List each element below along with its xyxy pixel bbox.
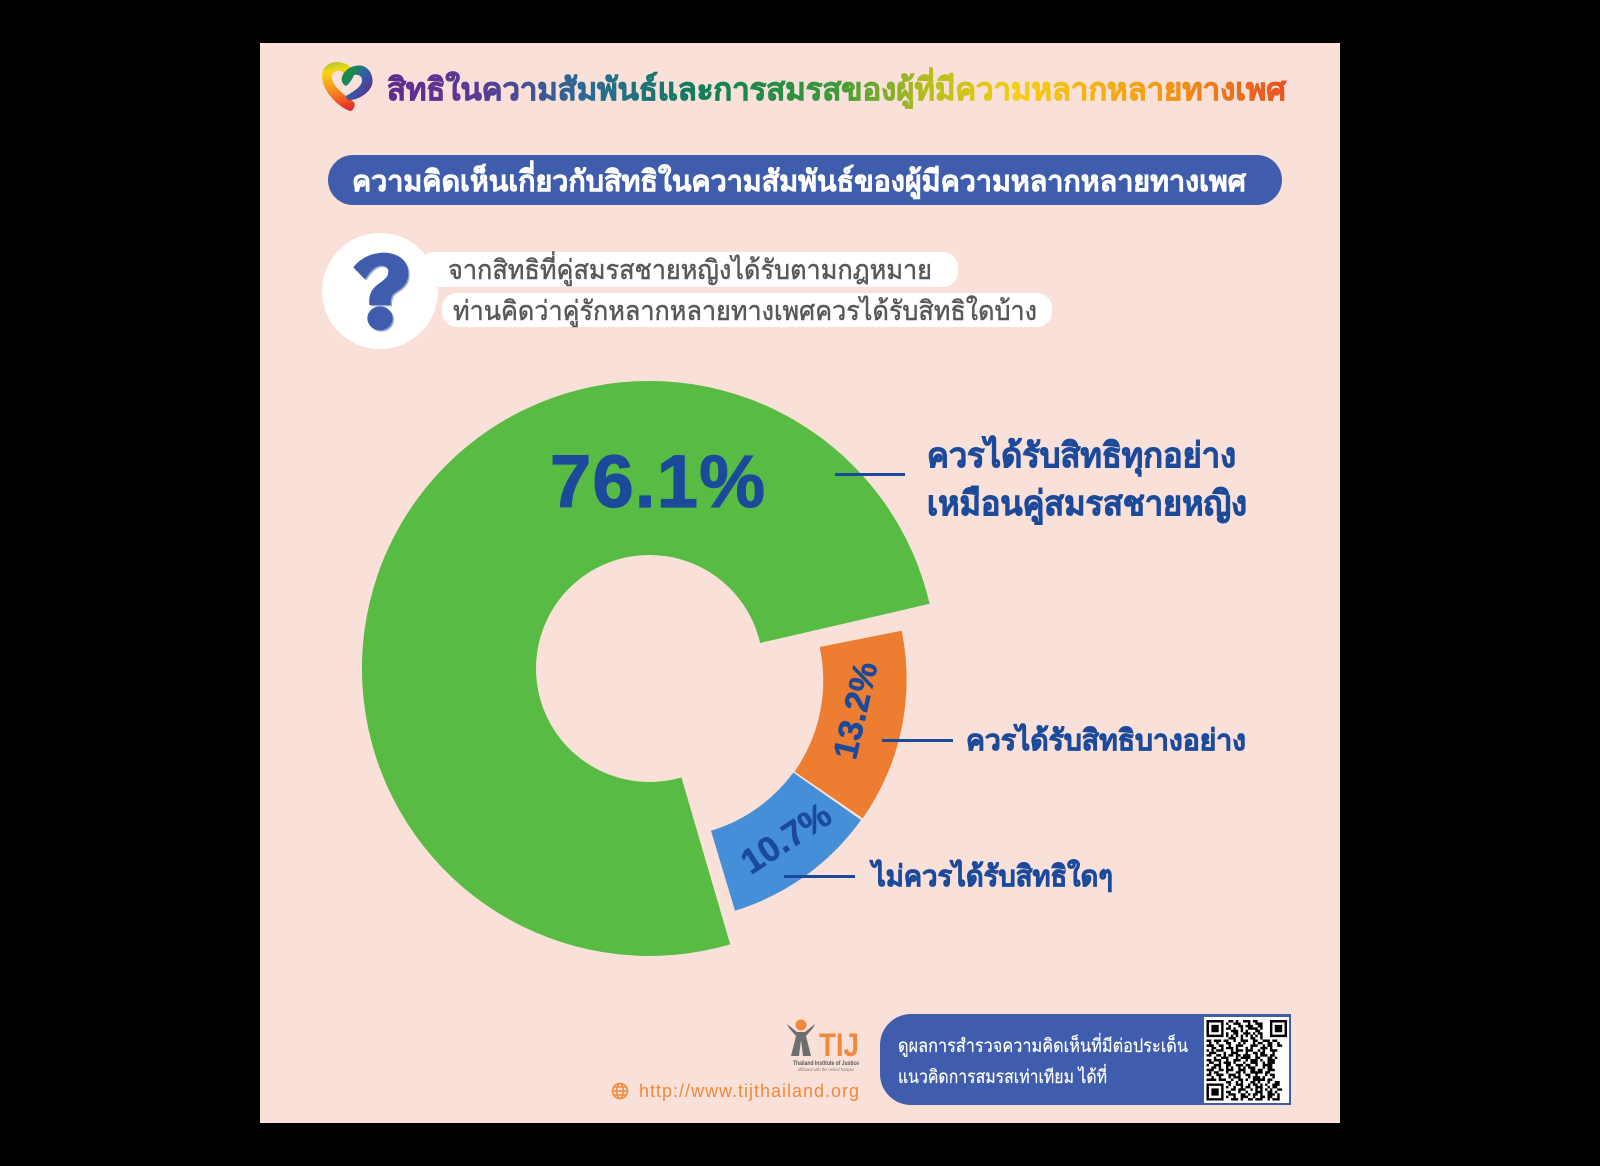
callout: no rights: ไม่ควรได้รับสิทธิใดๆ (869, 859, 1113, 893)
subtitle banner: ความคิดเห็นเกี่ยวกับสิทธิในความสัมพันธ์ของผู้มีความหลากหลายทางเพศ (352, 160, 1247, 199)
question block (322, 233, 1052, 349)
url: http://www.tijthailand.org (639, 1081, 859, 1101)
website link (612, 1081, 859, 1101)
survey text: แนวคิดการสมรสเท่าเทียม ได้ที่ (898, 1064, 1107, 1087)
QR code (1204, 1017, 1289, 1103)
background panel (260, 43, 1340, 1123)
icon: person with raised arms (787, 1020, 815, 1056)
question icon (322, 233, 438, 349)
value 10.7%: 10.7% (734, 795, 839, 882)
survey text (898, 1033, 1188, 1087)
survey text: ดูผลการสำรวจความคิดเห็นที่มีต่อประเด็น (898, 1033, 1188, 1057)
TIJ logo (787, 1020, 860, 1072)
logo: rainbow heart (322, 62, 373, 111)
slice: 13.2% orange (795, 631, 907, 818)
callout: all rights: เหมือนคู่สมรสชายหญิง (927, 485, 1247, 525)
slice: 76.1% green (362, 381, 930, 956)
question line 1: จากสิทธิที่คู่สมรสชายหญิงได้รับตามกฎหมาย (448, 251, 932, 286)
institute name: Thailand Institute of Justice (793, 1061, 860, 1067)
question line 2: ท่านคิดว่าคู่รักหลากหลายทางเพศควรได้รับสิทธิใดบ้าง (453, 295, 1037, 327)
callout: some rights: ควรได้รับสิทธิบางอย่าง (966, 723, 1246, 757)
affiliation line: affiliated with the United Nations (798, 1067, 855, 1072)
survey link box (880, 1014, 1291, 1105)
value 76.1%: 76.1% (550, 440, 765, 523)
title: สิทธิในความสัมพันธ์และการสมรสของผู้ที่มีความหลากหลายทางเพศ (387, 67, 1287, 109)
callout: no rights (784, 859, 1113, 893)
callout: all rights (835, 435, 1247, 525)
donut chart (362, 381, 930, 956)
value 13.2%: 13.2% (826, 658, 886, 763)
TIJ wordmark: TIJ (819, 1027, 859, 1063)
subtitle banner (328, 155, 1282, 205)
callout: all rights: ควรได้รับสิทธิทุกอย่าง (927, 435, 1236, 477)
icon: globe (612, 1084, 628, 1098)
slice: 10.7% blue (711, 773, 861, 911)
